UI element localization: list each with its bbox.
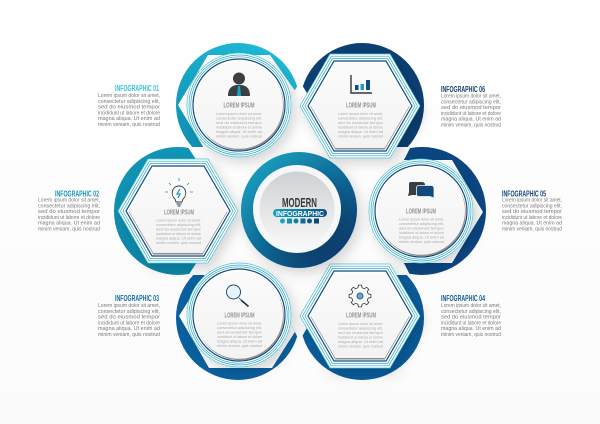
label: Infographic 04: incididunt ut labore et dolore	[441, 320, 501, 326]
label: Infographic 04: Lorem ipsum dolor sit amet,	[441, 303, 501, 309]
label: Infographic 02: magna aliqua. Ut enim ad	[38, 221, 100, 227]
label: Infographic 03: Lorem ipsum dolor sit amet,	[98, 303, 160, 309]
node 03 body text: sed do eiusmod tempor	[217, 330, 263, 334]
label: Infographic 02: minim veniam, quis nostrud	[38, 226, 100, 232]
node 06 body text: minim veniam, quis nostrud	[338, 134, 383, 138]
node 03 body text: incididunt ut labore et dolore	[217, 334, 262, 339]
node 05 body text: incididunt ut labore et dolore	[399, 230, 444, 235]
node 06 body text	[338, 111, 384, 138]
node 06 body text: Lorem ipsum dolor sit amet,	[338, 111, 383, 116]
label: Infographic 03: minim veniam, quis nostrud	[98, 332, 160, 338]
label: Infographic 01: INFOGRAPHIC 01	[115, 84, 159, 93]
icon: businessman	[228, 72, 250, 96]
ring: bottom-right blue	[302, 275, 424, 380]
node 03 body text: minim veniam, quis nostrud	[217, 343, 262, 348]
label: Infographic 04: magna aliqua. Ut enim ad	[441, 326, 501, 332]
node 02 title: LOREM IPSUM	[164, 210, 194, 216]
node 03 body text: magna aliqua. Ut enim ad	[217, 338, 262, 344]
node 06 body text: incididunt ut labore et dolore	[338, 124, 383, 130]
node 01 body text	[216, 111, 263, 138]
label: Infographic 02: consectetur adipiscing elit,	[38, 203, 100, 209]
node 01 body text: Lorem ipsum dolor sit amet,	[216, 111, 262, 116]
label: Infographic 03: magna aliqua. Ut enim ad	[98, 326, 160, 332]
label: Infographic 01: minim veniam, quis nostrud	[98, 122, 160, 128]
node 03 body text: Lorem ipsum dolor sit amet,	[217, 320, 262, 326]
label: Infographic 03: consectetur adipiscing elit,	[98, 309, 160, 315]
node 04 title: LOREM IPSUM	[346, 312, 376, 320]
label: Infographic 02: incididunt ut labore et dolore	[38, 215, 100, 221]
ring: top-right navy	[302, 43, 424, 147]
icon: chat bubbles	[408, 182, 434, 198]
node 02 body text: sed do eiusmod tempor	[156, 226, 202, 232]
label: Infographic 02: INFOGRAPHIC 02	[55, 190, 99, 198]
node 03 body text	[217, 320, 263, 348]
node 02 body text: incididunt ut labore et dolore	[156, 231, 201, 236]
label: Infographic 05	[502, 190, 562, 232]
node 06 title: LOREM IPSUM	[346, 102, 376, 110]
node 01 title: LOREM IPSUM	[224, 102, 255, 110]
label: Infographic 04: consectetur adipiscing elit,	[441, 309, 501, 315]
label: Infographic 04	[441, 294, 501, 338]
centre squares row	[280, 218, 319, 224]
label: Infographic 01	[98, 84, 160, 128]
node 05 body text: Lorem ipsum dolor sit amet,	[399, 216, 444, 222]
label: Infographic 03	[98, 294, 160, 338]
node 05 body text: magna aliqua. Ut enim ad	[399, 234, 444, 240]
label: Infographic 06: magna aliqua. Ut enim ad	[441, 117, 501, 123]
icon: gear	[349, 285, 371, 307]
icon: light bulb	[165, 178, 193, 206]
node 03 title: LOREM IPSUM	[224, 312, 255, 320]
panel: node 02 hexagon	[118, 159, 238, 263]
label: Infographic 03: INFOGRAPHIC 03	[115, 294, 159, 303]
label: Infographic 05: magna aliqua. Ut enim ad	[502, 221, 562, 227]
label: Infographic 01: magna aliqua. Ut enim ad	[98, 116, 160, 122]
node 05 title: LOREM IPSUM	[406, 208, 436, 216]
node 06 body text: magna aliqua. Ut enim ad	[338, 129, 383, 134]
label: Infographic 02: sed do eiusmod tempor	[38, 209, 100, 215]
label: Infographic 04: minim veniam, quis nostrud	[441, 332, 501, 338]
node 01 body text: magna aliqua. Ut enim ad	[216, 129, 262, 134]
label: Infographic 06: incididunt ut labore et dolore	[441, 111, 501, 117]
node 04 body text: sed do eiusmod tempor	[338, 330, 384, 335]
label: Infographic 06: minim veniam, quis nostrud	[441, 122, 501, 128]
node 05 body text: sed do eiusmod tempor	[399, 226, 445, 230]
label: Infographic 05: minim veniam, quis nostrud	[502, 226, 562, 232]
node 05 body text: consectetur adipiscing elit,	[399, 221, 444, 226]
node 02 body text: magna aliqua. Ut enim ad	[156, 236, 201, 240]
panel: node 03 circle	[38, 84, 562, 368]
label: Infographic 03: incididunt ut labore et dolore	[98, 320, 160, 326]
label: Infographic 06: Lorem ipsum dolor sit amet,	[441, 94, 501, 100]
node 04 body text: consectetur adipiscing elit,	[338, 326, 383, 330]
ring: top-left cyan	[176, 43, 298, 147]
label: Infographic 04: sed do eiusmod tempor	[441, 315, 501, 321]
icon: magnifier	[226, 285, 248, 306]
label: Infographic 01: Lorem ipsum dolor sit amet,	[98, 93, 160, 99]
node 02 body text: consectetur adipiscing elit,	[156, 222, 201, 227]
node 01 body text: sed do eiusmod tempor	[216, 120, 263, 125]
node 05 body text	[399, 216, 445, 244]
centre pill: INFOGRAPHIC: INFOGRAPHIC	[276, 209, 325, 218]
node 06 body text: sed do eiusmod tempor	[338, 120, 384, 125]
panel: centre badge	[241, 152, 357, 268]
label: Infographic 01: sed do eiusmod tempor	[98, 105, 160, 111]
node 03 body text: consectetur adipiscing elit,	[217, 325, 262, 330]
ring: middle-right navy	[402, 147, 486, 275]
label: Infographic 01: incididunt ut labore et dolore	[98, 110, 160, 116]
node 02 body text: minim veniam, quis nostrud	[156, 240, 201, 245]
panel: node 05 circle	[38, 84, 562, 368]
label: Infographic 06: consectetur adipiscing elit,	[441, 99, 501, 105]
label: Infographic 06	[441, 85, 501, 128]
panel: node 01 circle	[187, 53, 291, 157]
panel: node 06 hexagon	[300, 54, 420, 158]
ring: bottom-left blue	[176, 275, 298, 380]
node 06 body text: consectetur adipiscing elit,	[338, 116, 383, 120]
centre title: MODERN: MODERN	[282, 196, 317, 210]
node 01 body text: incididunt ut labore et dolore	[216, 124, 262, 130]
panel: node 04 hexagon	[300, 264, 420, 368]
label: Infographic 03: sed do eiusmod tempor	[98, 315, 160, 321]
label: Infographic 06: sed do eiusmod tempor	[441, 105, 501, 111]
node 04 body text	[338, 321, 384, 348]
node 02 body text	[156, 218, 202, 245]
node 01 body text: minim veniam, quis nostrud	[216, 134, 262, 138]
icon: bar chart	[351, 75, 372, 93]
label: Infographic 05: incididunt ut labore et dolore	[502, 215, 562, 221]
label: Infographic 05: Lorem ipsum dolor sit amet,	[502, 198, 562, 204]
label: Infographic 04: INFOGRAPHIC 04	[441, 294, 485, 303]
node 04 body text: magna aliqua. Ut enim ad	[338, 339, 383, 344]
label: Infographic 02	[38, 190, 100, 232]
label: Infographic 06: INFOGRAPHIC 06	[441, 85, 485, 94]
node 04 body text: incididunt ut labore et dolore	[338, 334, 383, 340]
node 05 body text: minim veniam, quis nostrud	[399, 239, 444, 244]
ring: middle-left teal	[114, 147, 196, 275]
node 04 body text: minim veniam, quis nostrud	[338, 344, 383, 348]
label: Infographic 01: consectetur adipiscing elit,	[98, 99, 160, 105]
label: Infographic 05: INFOGRAPHIC 05	[502, 190, 546, 198]
node 04 body text: Lorem ipsum dolor sit amet,	[338, 321, 383, 326]
node 01 body text: consectetur adipiscing elit,	[216, 116, 262, 120]
label: Infographic 05: sed do eiusmod tempor	[502, 209, 562, 215]
label: Infographic 02: Lorem ipsum dolor sit amet,	[38, 198, 100, 204]
label: Infographic 05: consectetur adipiscing elit,	[502, 203, 562, 209]
node 02 body text: Lorem ipsum dolor sit amet,	[156, 218, 201, 222]
